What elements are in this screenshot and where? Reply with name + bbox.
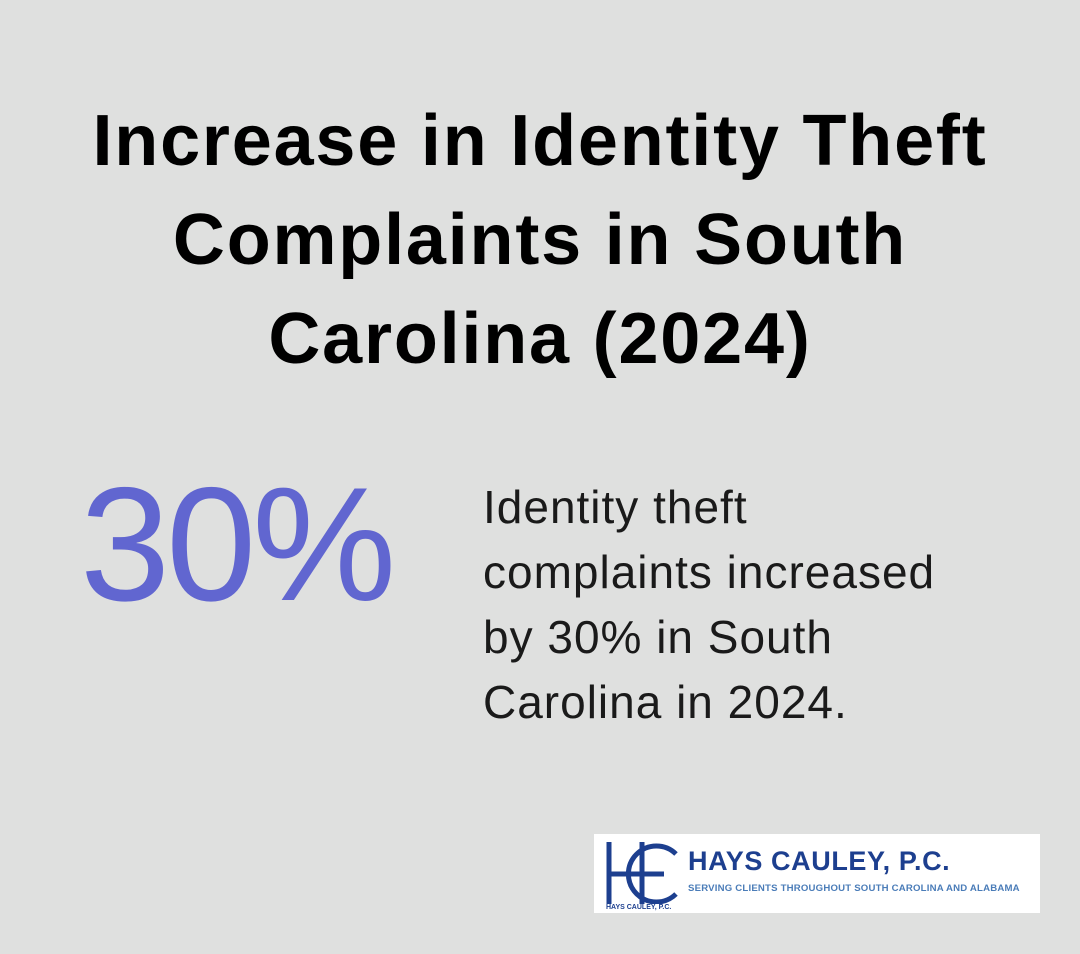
description text: by 30% in South [483,611,833,663]
description text: Identity theft [483,481,748,533]
title: Increase in Identity Theft [92,101,987,181]
title: Complaints in South [173,200,907,280]
logo small caption: HAYS CAULEY, P.C. [606,904,671,911]
description text: Carolina in 2024. [483,676,848,728]
logo tagline: SERVING CLIENTS THROUGHOUT SOUTH CAROLINA AND ALABAMA [688,883,1020,894]
icon: HC monogram [606,842,678,904]
logo name: HAYS CAULEY, P.C. [688,846,950,876]
logo: Hays Cauley [594,834,1040,913]
title: Carolina (2024) [268,299,812,379]
description text [483,481,935,728]
title [92,101,987,379]
stat: 30%: 30% [80,454,392,635]
description text: complaints increased [483,546,935,598]
